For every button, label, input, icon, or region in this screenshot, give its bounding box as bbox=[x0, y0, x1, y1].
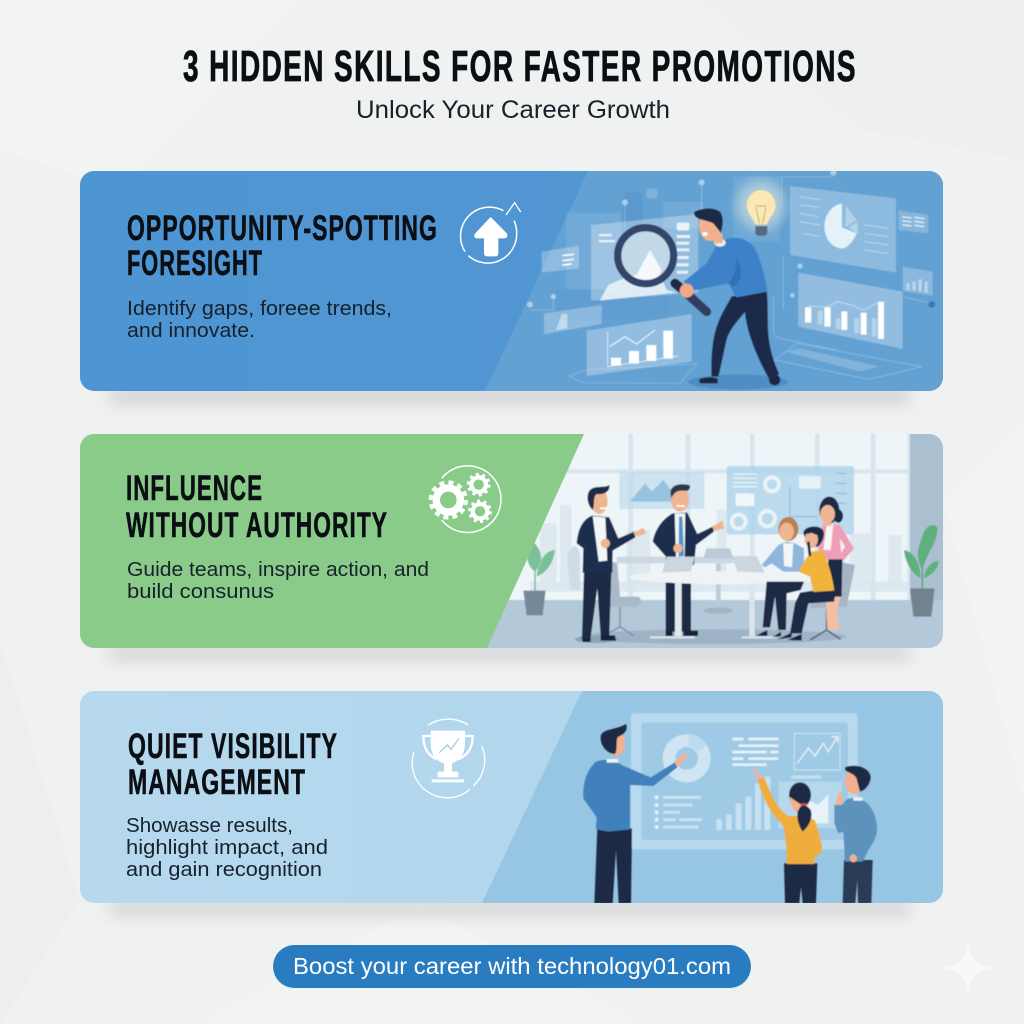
panel: influence without authority bbox=[80, 430, 947, 653]
description text: and gain recognition bbox=[126, 858, 322, 881]
description text bbox=[127, 297, 392, 342]
subtitle: Unlock Your Career Growth bbox=[356, 96, 670, 124]
description text: build consunus bbox=[127, 580, 274, 603]
panel: quiet visibility management bbox=[80, 691, 943, 903]
panel shadow: opportunity panel bbox=[110, 389, 910, 403]
description text bbox=[126, 814, 328, 881]
panel 1 background bbox=[80, 171, 943, 391]
icon: up arrow in circle bbox=[461, 203, 521, 263]
panel: opportunity-spotting foresight bbox=[80, 170, 943, 391]
heading: quiet visibility management bbox=[128, 727, 338, 802]
panel 3 background bbox=[80, 691, 943, 903]
call to action button: Boost your career with technology01.com bbox=[293, 953, 731, 979]
description text: Identify gaps, foreee trends, bbox=[127, 297, 392, 320]
heading: influence without authority: WITHOUT AUTHORITY bbox=[126, 506, 388, 545]
panel 3 illustration: team at dashboard bbox=[482, 691, 943, 903]
heading: influence without authority bbox=[126, 469, 388, 545]
description text bbox=[127, 558, 429, 603]
panel 2 illustration: office meeting bbox=[80, 430, 947, 653]
icon: sparkle bbox=[943, 943, 993, 993]
description text: Guide teams, inspire action, and bbox=[127, 558, 429, 581]
heading: quiet visibility management: MANAGEMENT bbox=[128, 763, 306, 802]
description text: highlight impact, and bbox=[126, 836, 328, 859]
heading: opportunity-spotting foresight: OPPORTUNITY-SPOTTING bbox=[127, 209, 438, 248]
description text: Showasse results, bbox=[126, 814, 293, 837]
panel shadow: visibility panel bbox=[110, 901, 910, 915]
heading: influence without authority: INFLUENCE bbox=[126, 469, 263, 508]
call to action button bbox=[273, 945, 751, 988]
panel 1 illustration: analyst with magnifying glass bbox=[485, 170, 943, 391]
icon: trophy in circle bbox=[412, 719, 485, 798]
heading: opportunity-spotting foresight bbox=[127, 209, 438, 283]
heading: quiet visibility management: QUIET VISIBILITY bbox=[128, 727, 338, 766]
icon: gears in circle bbox=[431, 466, 501, 532]
heading: opportunity-spotting foresight: FORESIGHT bbox=[127, 244, 263, 283]
panel shadow: influence panel bbox=[110, 646, 910, 660]
description text: and innovate. bbox=[127, 319, 255, 342]
